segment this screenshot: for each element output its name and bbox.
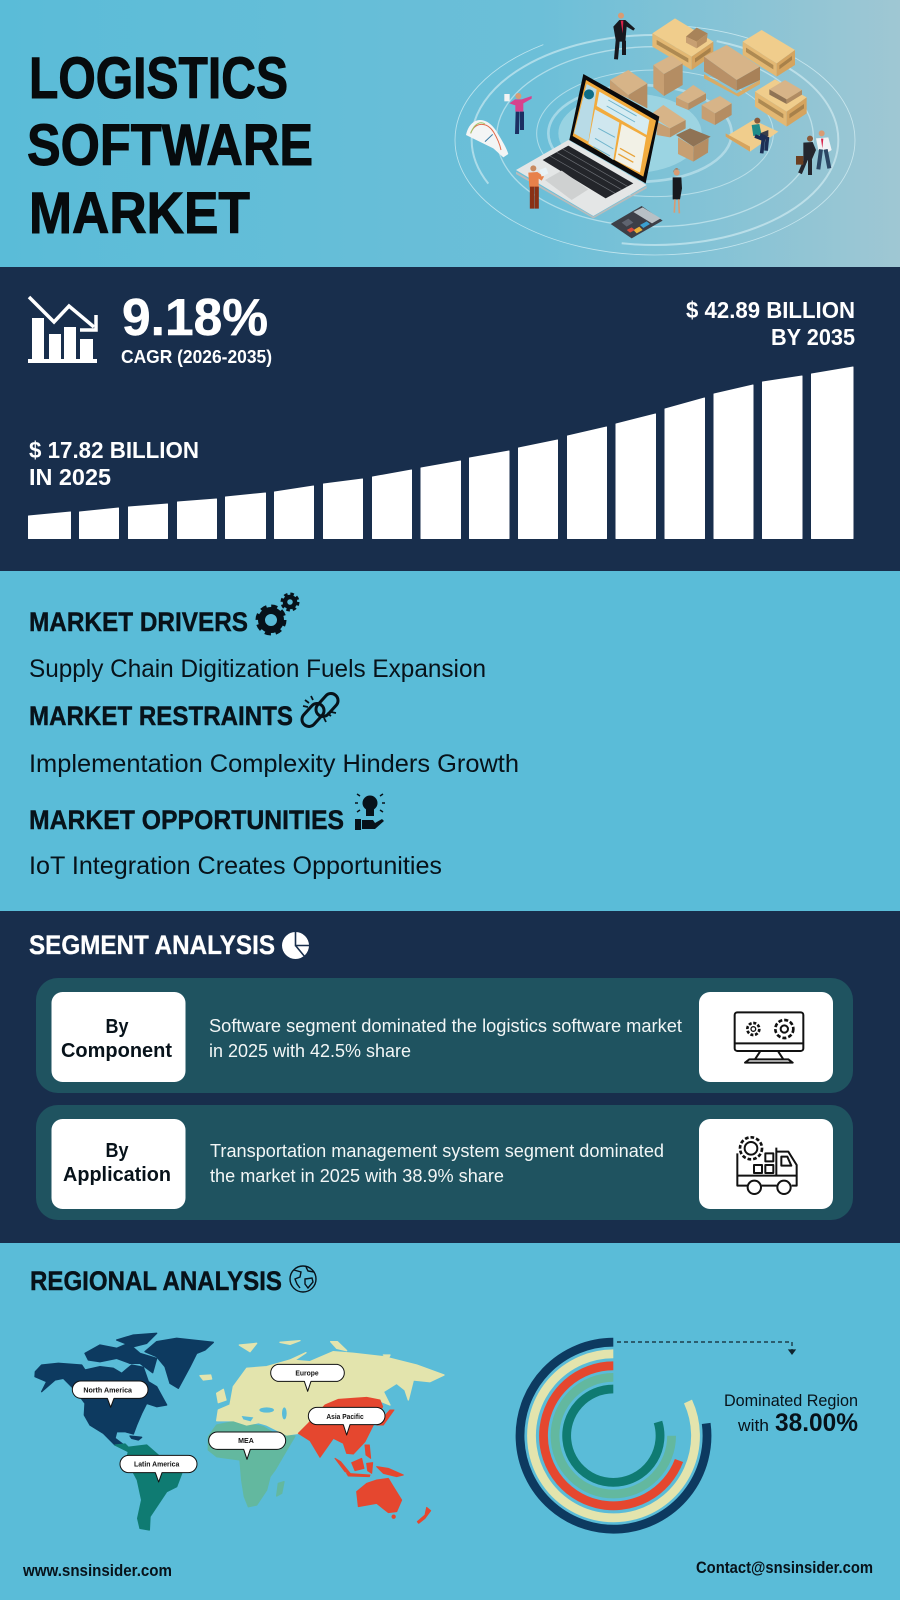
laptop xyxy=(516,74,659,218)
text: drivers: Supply Chain Digitization Fuels Expansion xyxy=(29,655,486,683)
text: application share xyxy=(210,1140,664,1186)
pallets and boxes xyxy=(610,18,807,162)
world map xyxy=(35,1333,444,1530)
text: component share: in 2025 with 42.5% share xyxy=(209,1040,411,1061)
seas xyxy=(242,1407,287,1421)
text: application share: the market in 2025 with 38.9% share xyxy=(210,1165,504,1186)
callout: dominated region xyxy=(724,1391,858,1437)
icon: globe xyxy=(290,1266,316,1292)
person: tablet user xyxy=(528,165,548,209)
panel: market size xyxy=(0,267,900,571)
callout: North America: North America xyxy=(83,1385,133,1394)
panel: regional analysis xyxy=(30,1266,858,1530)
region: Asia Pacific xyxy=(298,1397,431,1523)
bar chart xyxy=(28,367,853,538)
end value: BY 2035 xyxy=(771,324,855,350)
callout: dominated region: with xyxy=(737,1416,769,1435)
footer: website: www.snsinsider.com xyxy=(22,1561,172,1580)
person: seated xyxy=(752,118,768,153)
start value: IN 2025 xyxy=(29,464,111,490)
icon: broken chain xyxy=(299,691,341,729)
label box: by component xyxy=(52,992,186,1082)
region: MEA xyxy=(208,1422,295,1507)
text: component share xyxy=(209,1015,682,1061)
region: Latin America xyxy=(115,1444,182,1530)
callout: Latin America xyxy=(120,1455,197,1482)
people xyxy=(504,13,832,213)
label box: by application xyxy=(52,1119,186,1209)
icon box: monitor with gears xyxy=(699,992,833,1082)
radial chart xyxy=(520,1342,707,1529)
callout: MEA xyxy=(209,1432,286,1459)
label box: by component: By xyxy=(106,1016,129,1038)
CAGR label: CAGR (2026-2035) xyxy=(121,347,272,367)
title: LOGISTICS xyxy=(29,46,288,111)
callout: MEA: MEA xyxy=(238,1436,254,1445)
title xyxy=(27,46,313,246)
callout: Asia Pacific xyxy=(308,1407,385,1435)
callout: Europe xyxy=(271,1364,344,1391)
title: SOFTWARE xyxy=(27,113,313,178)
gauge xyxy=(466,120,508,157)
title: MARKET xyxy=(29,181,250,246)
text: restraints: Implementation Complexity Hinders Growth xyxy=(29,750,519,778)
text: component share: Software segment dominated the logistics software market xyxy=(209,1015,682,1036)
calculator xyxy=(611,206,663,238)
icon: gears xyxy=(258,594,298,634)
region: Europe xyxy=(200,1341,444,1435)
start value: $ 17.82 BILLION xyxy=(29,437,199,463)
person: pink shirt xyxy=(504,93,532,134)
callout: dominated region: 38.00% xyxy=(775,1409,858,1437)
region: North America xyxy=(35,1333,213,1445)
CAGR value: 9.18% xyxy=(122,289,268,347)
text: application share: Transportation management system segment dominated xyxy=(210,1140,664,1161)
callout: North America xyxy=(72,1381,148,1407)
icon: pie chart xyxy=(282,931,310,959)
icon: growth chart xyxy=(28,297,97,363)
card: by application xyxy=(36,1105,853,1220)
label box: by application: By xyxy=(106,1140,129,1162)
callout: Latin America: Latin America xyxy=(134,1459,180,1468)
end value xyxy=(686,297,855,350)
end value: $ 42.89 BILLION xyxy=(686,297,855,323)
person: woman xyxy=(673,168,682,213)
heading: segment analysis: SEGMENT ANALYSIS xyxy=(29,930,275,960)
callout: dominated region: Dominated Region xyxy=(724,1391,858,1410)
start value xyxy=(29,437,199,490)
label box: by component: Component xyxy=(61,1040,172,1062)
panel: segment analysis xyxy=(0,911,900,1243)
icon: idea in hand xyxy=(355,794,385,830)
heading: market opportunities: MARKET OPPORTUNITIES xyxy=(29,805,344,835)
orbit rings xyxy=(455,26,855,255)
label box: by application: Application xyxy=(63,1164,171,1186)
text: opportunities: IoT Integration Creates Opportunities xyxy=(29,852,442,880)
callout: Asia Pacific: Asia Pacific xyxy=(326,1412,364,1421)
heading: regional analysis: REGIONAL ANALYSIS xyxy=(30,1266,282,1296)
icon box: truck with gear xyxy=(699,1119,833,1209)
panel: market dynamics xyxy=(29,594,519,880)
hero illustration: logistics software xyxy=(455,13,855,255)
person: manager xyxy=(613,13,635,59)
heading: market drivers: MARKET DRIVERS xyxy=(29,607,248,637)
dashed arrow xyxy=(617,1342,795,1354)
heading: market restraints: MARKET RESTRAINTS xyxy=(29,701,293,731)
people: handshake xyxy=(796,130,832,175)
card: by component xyxy=(36,978,853,1093)
footer: contact: Contact@snsinsider.com xyxy=(696,1558,873,1577)
callout: Europe: Europe xyxy=(295,1369,319,1378)
